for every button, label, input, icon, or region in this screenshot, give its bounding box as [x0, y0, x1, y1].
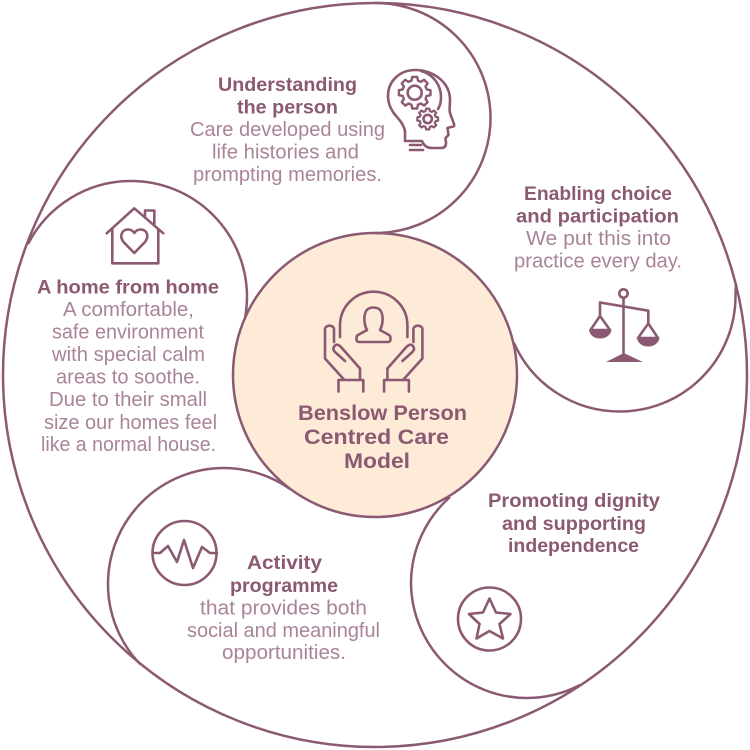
text block: enabling choice: We put this into — [526, 228, 671, 250]
lobe outline: a home from home — [28, 181, 247, 318]
panel: activity programme — [152, 521, 380, 664]
text block: a home from home: safe environment — [52, 322, 204, 344]
text block: a home from home: Due to their small — [49, 389, 207, 411]
lobe outline: promoting dignity — [411, 497, 580, 698]
text block: enabling choice: practice every day. — [514, 250, 682, 272]
heading: understanding the person: Understanding — [218, 75, 357, 96]
panel: understanding the person — [190, 70, 454, 186]
central circle — [233, 233, 517, 517]
heading: promoting dignity — [488, 491, 660, 557]
heading: benslow person centred care model: Model — [344, 449, 410, 473]
heading: activity programme: Activity — [247, 553, 322, 574]
heading: benslow person centred care model: Benslow Person — [298, 401, 467, 425]
heading: enabling choice: Enabling choice — [524, 184, 672, 205]
heading: activity programme: programme — [230, 576, 338, 597]
panel: enabling choice and participation — [514, 184, 682, 362]
text block: a home from home — [41, 299, 217, 456]
heading: benslow person centred care model: Centred Care — [304, 425, 449, 449]
heading: promoting dignity: independence — [508, 536, 639, 557]
text block: a home from home: A comfortable, — [63, 299, 194, 321]
heading: activity programme — [230, 553, 338, 597]
text block: understanding the person: Care developed using — [190, 119, 385, 141]
icon: house with heart — [107, 208, 163, 263]
text block: a home from home: size our homes feel — [44, 412, 217, 434]
lobe outline: enabling choice — [514, 284, 736, 412]
icon: hands holding person — [325, 292, 422, 392]
text block: activity programme — [187, 598, 380, 664]
heading: understanding the person: the person — [237, 98, 338, 118]
text block: activity programme: opportunities. — [222, 642, 346, 664]
panel: central model — [298, 292, 467, 473]
icon: pulse in circle — [152, 521, 217, 585]
text block: understanding the person: life histories and — [212, 142, 359, 164]
icon: scales — [589, 289, 660, 362]
text block: a home from home: areas to soothe. — [56, 366, 200, 388]
heading: promoting dignity: Promoting dignity — [488, 491, 660, 512]
heading: enabling choice: and participation — [516, 206, 679, 228]
text block: understanding the person: prompting memories. — [193, 164, 382, 186]
text block: enabling choice — [514, 228, 682, 272]
icon: star in circle — [458, 588, 521, 650]
heading: a home from home: A home from home — [37, 278, 219, 298]
heading: understanding the person — [218, 75, 357, 118]
heading: promoting dignity: and supporting — [502, 514, 646, 535]
text block: a home from home: like a normal house. — [41, 434, 216, 456]
text block: activity programme: social and meaningful — [187, 620, 380, 642]
text block: activity programme: that provides both — [200, 598, 367, 620]
heading: enabling choice — [516, 184, 679, 228]
lobe outline: understanding the person — [375, 3, 490, 233]
text block: a home from home: with special calm — [51, 344, 205, 366]
icon: head with gears — [388, 70, 454, 150]
heading: benslow person centred care model — [298, 401, 467, 473]
text block: understanding the person — [190, 119, 385, 186]
lobe outline: activity programme — [108, 468, 290, 664]
panel: a home from home — [37, 208, 219, 456]
panel: promoting dignity — [458, 491, 660, 650]
